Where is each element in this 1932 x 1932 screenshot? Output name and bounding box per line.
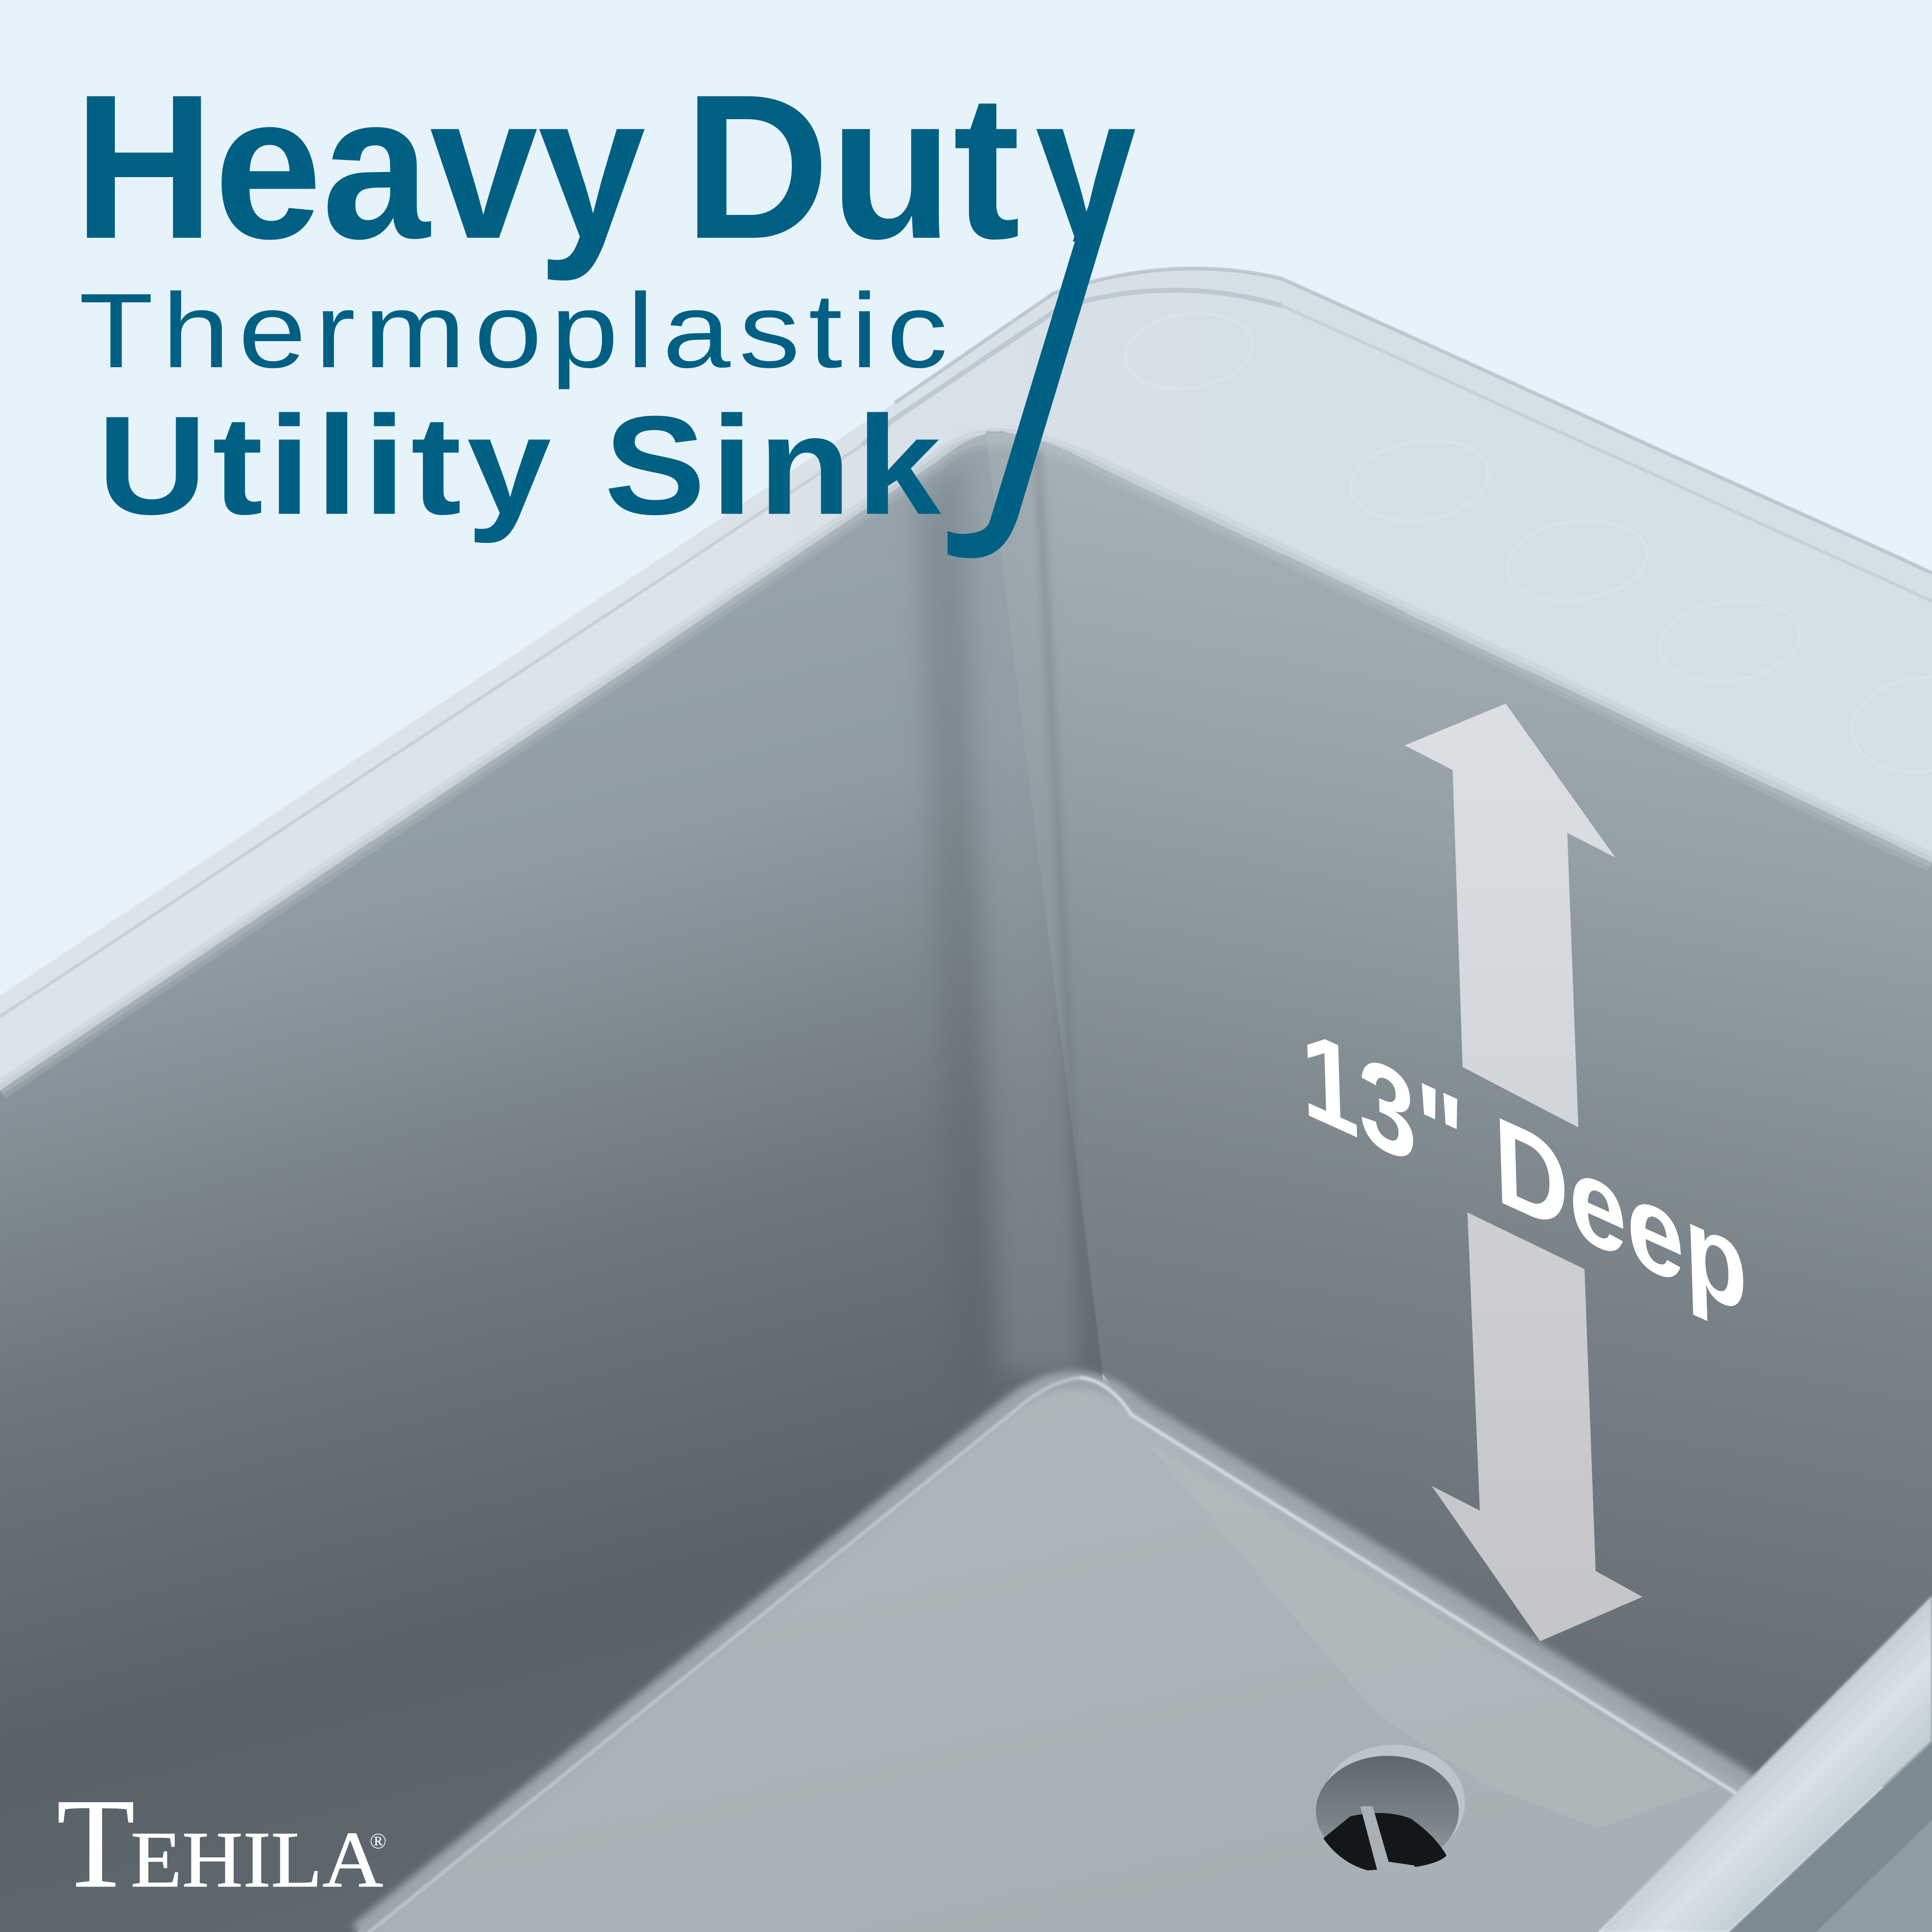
floor soft edge (357, 1380, 1751, 1932)
arrow upper half (1405, 703, 1615, 1128)
rim circular marks (1121, 306, 1932, 781)
subheading: Utility Sink: Utility Sink (97, 387, 946, 544)
right wall (986, 431, 1932, 1786)
front rim shadow area (1729, 1741, 1932, 1932)
logo: ® (370, 1829, 387, 1853)
heading: Heavy Duty: Heavy (74, 52, 647, 283)
wall top inner soft edge (0, 438, 1932, 1090)
inner corner dark band (918, 456, 995, 1405)
title (74, 52, 1137, 558)
drain ridge (1322, 1745, 1465, 1861)
rim outer ridge groove (0, 290, 1932, 1016)
inner corner light band (967, 450, 1084, 1374)
logo: T (57, 1773, 135, 1914)
wall top soft edge (0, 438, 1932, 1090)
floor right edge highlight (1079, 1377, 1737, 1794)
floor slope facet (1146, 1441, 1715, 1829)
sink rim (0, 268, 1932, 1094)
subheading: Thermoplastic: Thermoplastic (79, 272, 956, 390)
depth label: 13" Deep (1299, 1002, 1749, 1341)
left wall (0, 431, 1103, 1932)
arrow lower half (1432, 1212, 1642, 1641)
drain dark hole (1323, 1813, 1447, 1870)
drain rib (1360, 1806, 1415, 1872)
inner corner crease (1038, 450, 1087, 1374)
heading: Heavy Duty: Dut (684, 52, 1020, 282)
front rim band (1598, 1595, 1932, 1932)
floor left edge highlight (357, 1377, 1079, 1932)
logo: EHILA (131, 1816, 383, 1904)
logo (57, 1773, 387, 1914)
drain (1316, 1745, 1465, 1872)
heading: Heavy Duty: y (1035, 52, 1137, 283)
sink floor (357, 1380, 1751, 1932)
depth arrow (1405, 703, 1642, 1641)
far front rim facet (1816, 1820, 1932, 1932)
elongated tail of the y (948, 131, 1135, 558)
drain opening (1316, 1756, 1459, 1867)
heading: Heavy Duty (74, 52, 1137, 558)
rim outer shadow line (894, 268, 1932, 573)
